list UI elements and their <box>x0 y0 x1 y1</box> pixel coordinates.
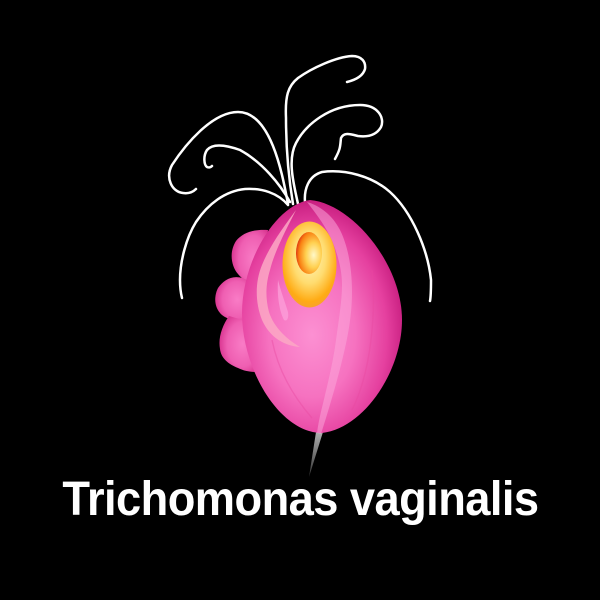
cell body <box>242 200 402 433</box>
flagellum: left large <box>169 112 288 204</box>
streak: small highlight <box>278 280 288 321</box>
nucleus <box>296 232 322 274</box>
lobe: undulating membrane middle <box>215 277 252 322</box>
flagellum: right wavy <box>292 105 382 204</box>
title: Trichomonas vaginalis <box>62 473 538 526</box>
faint arc: left inner line <box>272 340 312 418</box>
flagella <box>169 56 431 301</box>
costa: curved pale band <box>257 210 300 347</box>
flagellum: lower right long <box>305 171 431 301</box>
lobe: undulating membrane lower <box>219 316 258 372</box>
tail: axostyle tip <box>309 432 323 477</box>
nucleus halo <box>282 222 336 308</box>
lobe: undulating membrane upper <box>232 230 268 288</box>
axostyle: pale streak <box>307 202 352 434</box>
organism cell <box>215 200 402 477</box>
faint arc: right inner line <box>352 270 373 410</box>
flagellum: left small curl <box>204 145 290 202</box>
flagellum: top curl <box>286 56 365 204</box>
flagellum: lower left long <box>180 189 288 298</box>
